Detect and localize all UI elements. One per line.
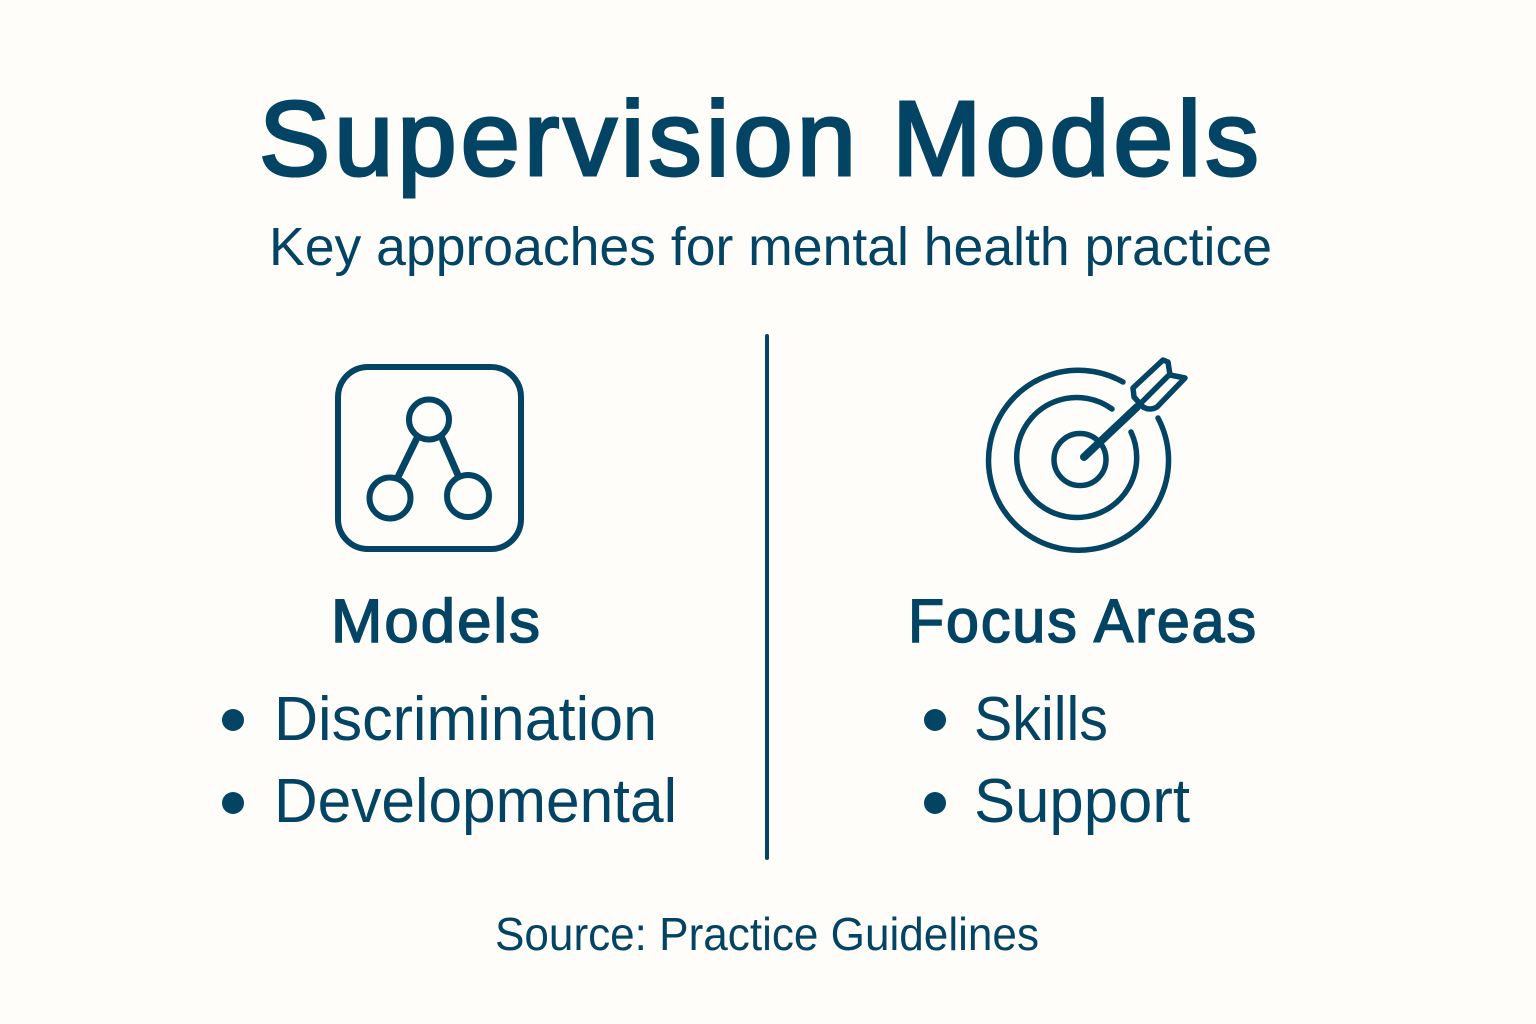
panel: focus areas (908, 360, 1258, 836)
list: focus areas (924, 685, 1190, 836)
title: Supervision (259, 80, 860, 198)
list: focus areas: Skills (974, 685, 1108, 754)
source note: Source: Practice Guidelines (495, 908, 1039, 960)
panel: models (222, 367, 677, 836)
icon: hierarchy nodes (338, 367, 521, 549)
list: models: Discrimination (274, 685, 657, 754)
icon: target with arrow (989, 360, 1185, 550)
list: focus areas: Support (974, 767, 1190, 836)
center divider (765, 336, 769, 858)
title: Models (892, 80, 1263, 198)
title (259, 80, 1263, 198)
list: models (222, 685, 677, 836)
subtitle: Key approaches for mental health practice (269, 217, 1272, 277)
list: models: Developmental (274, 767, 677, 836)
heading: models: Models (331, 587, 542, 655)
heading: focus areas: Focus Areas (908, 587, 1258, 655)
